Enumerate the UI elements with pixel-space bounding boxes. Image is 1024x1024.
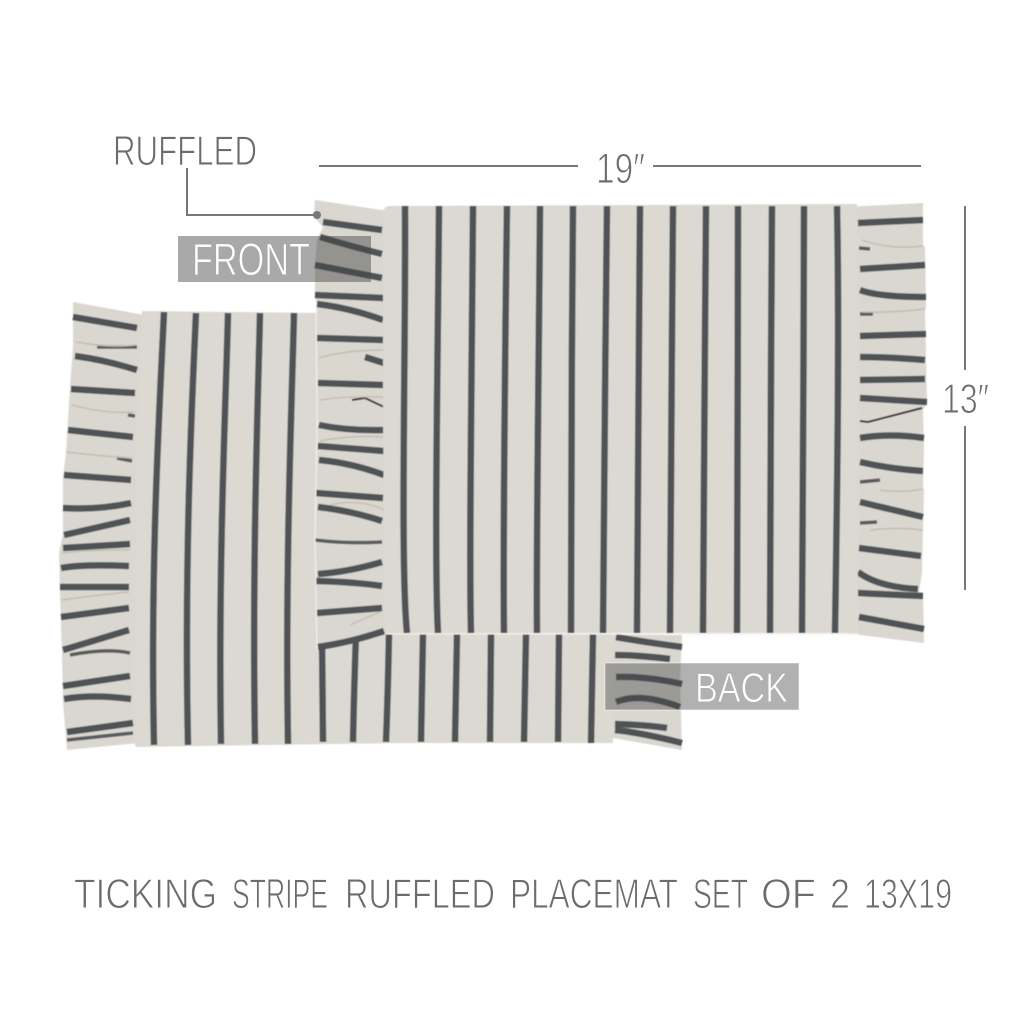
product title: PLACEMAT	[510, 870, 678, 917]
product title: OF	[761, 870, 816, 917]
product title: SET	[693, 870, 748, 917]
product title: RUFFLED	[345, 870, 495, 917]
back tag text: BACK	[695, 664, 788, 711]
ruffled label: RUFFLED	[113, 127, 257, 174]
back tag	[605, 663, 799, 711]
height value: 13″	[942, 375, 989, 422]
front placemat right ruffle	[845, 203, 927, 643]
width value: 19″	[596, 145, 645, 193]
product title: 13X19	[864, 870, 952, 917]
product title: STRIPE	[232, 870, 328, 917]
back placemat body	[134, 311, 614, 747]
front placemat	[314, 200, 927, 650]
back placemat right ruffle	[600, 634, 682, 750]
ruffled leader dot	[313, 211, 321, 219]
product title	[74, 870, 952, 917]
ruffled callout	[113, 127, 321, 219]
front placemat left ruffle	[314, 200, 395, 650]
back placemat left ruffle	[59, 302, 150, 750]
front placemat body	[383, 204, 858, 634]
front tag	[178, 234, 371, 285]
front tag text: FRONT	[192, 234, 310, 285]
back placemat	[59, 302, 682, 750]
product title: TICKING	[74, 870, 217, 917]
ruffled leader line	[187, 168, 316, 215]
product title: 2	[830, 870, 850, 917]
